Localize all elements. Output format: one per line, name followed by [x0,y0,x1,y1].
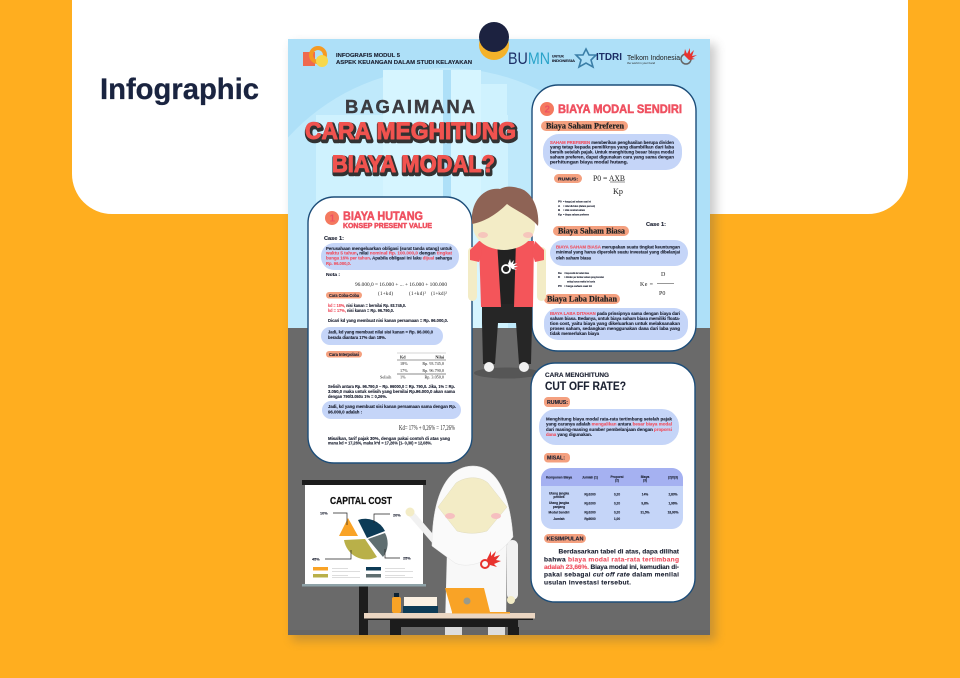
panel 3 heading: CARA MENGHITUNG [545,372,609,379]
logo: BUMN: INDONESIA [552,59,576,63]
pill: biaya laba ditahan: Biaya Laba Ditahan [547,294,618,304]
paragraph: kesimpulan: adalah 23,66%. Biaya modal ini, kemudian di- [544,564,679,571]
paragraph: kesimpulan: Berdasarkan tabel di atas, dapa dilihat [558,548,680,556]
title shadow: CARA MEGHITUNG [306,120,517,147]
table: wacc: 0,20 [614,510,620,514]
case 1 label: Case 1: [324,236,344,242]
title: BAGAIMANA [345,96,475,117]
formula: Ke: Ke = [640,282,654,288]
callout: saham biasa: BIAYA SAHAM BIASA merupakan suatu tingkat keuntungan [556,244,680,250]
legend: preferen: = harga jual saham saat ini [563,200,591,204]
poster [288,22,710,635]
table: wacc: Jumlah [553,517,565,521]
table: wacc: Utang jangka [549,492,569,496]
legend: preferen: A [558,204,561,208]
panel: biaya modal sendiri [532,85,696,351]
trial results: kd = 17%, nisi kanan = Rp. 96.790,0. [328,308,394,313]
icon: number 2: 2 [544,104,550,116]
nota label: Nota : [326,272,340,277]
table: wacc: Proporsi [610,475,624,479]
callout: saham preferen: saham preferen, dapat digunakan cara yang sama dengan [550,154,674,160]
pill: cara coba-coba: Cara Coba-Coba [329,293,360,298]
table: wacc: Rp1000 [584,492,596,496]
callout: saham preferen: perhitungan biaya modal hutang. [550,160,628,164]
pill: rumus [554,174,582,183]
paragraph: misalkan: mana kd = 17,26%, maka k*d = 17,26% (1- 0,30) = 12,08%. [328,440,432,446]
formula: P0 [593,174,625,196]
table: wacc: 0,20 [614,492,620,496]
formula: present value: (1+kd)² [409,291,426,297]
callout: saham biasa: minimal yang harus diperoleh suatu investasi yang dibelanjai [556,250,680,254]
books [403,597,438,613]
callout: laba ditahan: BIAYA LABA DITAHAN pada prinsipnya sama dengan biaya dari [550,311,680,316]
desk [364,588,535,635]
table: interpolasi [380,353,446,380]
callout: persamaan: Jadi, kd yang membuat sisi kanan persamaan sama dengan Rp. [328,404,456,409]
callout: saham preferen: bersih setelah pajak. Untuk menghitung besar biaya modal [550,150,674,154]
pill: misal: MISAL: [547,456,565,462]
callout: saham biasa [550,240,688,266]
figure: woman in hijab [406,466,518,635]
formula: Ke [640,272,674,297]
logo: Telkom Indonesia: Telkom Indonesia [627,53,681,62]
formula: present value: (1+kd)² [431,291,448,297]
table: wacc: 1,96% [668,502,678,506]
white header card [72,0,908,214]
paragraph: misalkan: Misalkan, tarif pajak 30%, dengan pakai contoh di atas yang [328,436,450,441]
table: wacc: (3) [643,478,647,482]
logo: BUMN: BUMN [508,49,550,68]
legend: preferen: B [558,208,561,212]
icon: hijab logo [481,551,501,568]
laptop [445,588,510,614]
paragraph: kesimpulan: usulan investasi tersebut. [544,580,631,586]
table: wacc: 14% [642,492,648,496]
table: wacc: Komponen Biaya [546,476,572,480]
formula: present value: 96.000,0 = 16.000 + ... + 16.000 + 100.000 [355,282,447,288]
table: wacc: Rp5000 [584,517,596,521]
logo: BUMN: UNTUK [552,54,565,58]
table: wacc: 18,90% [668,510,679,514]
paragraph: selisih: Selisih antara Rp. 96.790,0 – Rp. 96000,0 = Rp. 790,0. Jika, 1% = Rp. [328,384,455,389]
callout: rumus: Menghitung biaya modal rata-rata tertimbang setelah pajak [546,416,673,422]
poster background [288,39,710,635]
legend: biasa: = biaya modal dari saham biasa [564,271,589,275]
table: wacc [541,468,683,529]
trial results: kd = 18%, nisi kanan = bernilai Rp. 93.745,0. [328,303,406,308]
table: wacc: 31,5% [640,510,650,514]
callout: obligasi: Rp. 96.000,0. [326,261,351,266]
table: interpolasi: Rp. 3.050,0 [424,374,444,380]
table: wacc: 1,00 [614,517,620,521]
header title: INFOGRAFIS MODUL 5 [336,53,400,59]
paragraph: selisih: dengan 790/3.050x 1% = 0,26%. [328,394,387,399]
legend: preferen [558,200,595,216]
table: wacc: Modal Sendiri [549,510,570,514]
pill: cara interpolasi: Cara Interpolasi [329,352,359,357]
callout: jadi kd: Jadi, kd yang membuat nilai sisi kanan = Rp. 96.000,0 [328,330,434,334]
callout: jadi kd [321,327,443,345]
legend: biasa [558,271,604,288]
legend: preferen: Kp [558,212,562,216]
title shadow [306,120,517,180]
legend: preferen: = nilai nominal saham [563,208,585,212]
callout: laba ditahan [544,308,688,340]
legend: biasa: P0 [558,284,562,288]
logo: Telkom Indonesia: the world in your hand [627,61,656,65]
logo: course [303,48,328,67]
bottle [392,593,401,613]
panel: cut off rate [531,363,695,602]
panel 1 heading [343,209,432,230]
table: wacc: pendek [553,495,565,499]
pie chart: 10% [320,512,328,516]
pill: biaya saham biasa: Biaya Saham Biasa [558,226,625,236]
legend: biasa: = dividen per lembar saham yang konstan [564,275,604,279]
formula: kd result: Kd= 17% + 0,26% = 17,26% [399,424,455,432]
formula: present value [355,282,448,297]
panel: biaya hutang [308,197,472,463]
callout: obligasi: waktu 5 tahun , nilai nominal Rp. 100.000,0 dengan tingkat [325,250,453,256]
heading: Infographic: Infographic [100,73,259,106]
panel 3 heading: CUT OFF RATE? [545,381,626,393]
trial results: Dicari kd yang membuat nisi kanan persamaan = Rp. 96.000,0. [328,318,448,323]
table: interpolasi: 1% [400,374,406,380]
logo: ITDRI: ITDRI [596,52,622,63]
callout: obligasi [321,243,459,270]
panel 2 heading: BIAYA MODAL SENDIRI [558,102,682,116]
pie chart: 45% [312,558,320,562]
table: interpolasi: 17% [400,368,408,373]
chart legend [313,567,413,578]
pie chart: 25% [403,556,411,560]
paragraph: kesimpulan: pakai sebagai cut off rate dalam menilai [544,572,679,578]
legend: preferen: = biaya saham preferen [563,212,589,216]
table: interpolasi: Nilai [435,354,445,360]
callout: jadi kd: berada diantara 17% dan 18%. [328,335,386,340]
pie chart [312,512,411,562]
callout: saham biasa: oleh saham biasa [556,256,592,260]
legend: biasa: setiap bunus waktu ke bunia [567,280,595,284]
table: wacc: 2,80% [668,492,678,496]
callout: laba ditahan: proses saham, sedangkan menggunakan dana dari laba yang [550,326,680,331]
legend: biasa: = harga saham saat ini [564,284,592,288]
callout: laba ditahan: tion cost, yaitu biaya yang dikeluarkan untuk melaksanakan [550,321,680,326]
table: wacc: panjang [553,505,565,509]
table: wacc: 0,20 [614,502,620,506]
table: wacc: Rp1000 [584,510,596,514]
pill: biaya saham preferen: Biaya Saham Preferen [546,122,625,130]
callout: rumus: dana yang digunakan. [546,432,592,437]
paragraph: kesimpulan: bahwa biaya modal rata-rata tertimbang [544,556,679,564]
title [305,96,517,180]
pill: rumus: RUMUS: [558,176,578,182]
callout: persamaan: 96.000,0 adalah : [328,410,362,414]
paragraph: misalkan [328,436,450,446]
callout: rumus: dari masing-masing sumber pembelanjaan dengan proporsi [546,427,672,432]
table: interpolasi: Selisih [380,374,392,380]
formula: P0: P0 = AXB [593,174,625,183]
panel 1 heading: KONSEP PRESENT VALUE [343,223,432,230]
panel 3 heading [545,372,626,393]
chart board: capital cost [302,480,426,635]
table: interpolasi: 18% [400,361,408,366]
formula: present value: (1+kd) [378,292,393,297]
paragraph: kesimpulan [544,548,680,586]
table: wacc: (2)X(3) [668,476,678,480]
callout: persamaan [322,401,461,419]
pill: misal [544,453,570,462]
callout: laba ditahan: saham biasa. Bedanya, untuk biaya saham biasa memiliki floata- [550,316,681,321]
icon: number 1 [325,211,339,225]
case 1 label: Case 1: [646,222,666,228]
poster shadow [292,44,716,641]
callout: obligasi: Perusahaan mengeluarkan obligasi (surat tanda utang) untuk [326,246,453,251]
callout: obligasi: bunga 16% per tahun . Apabila obligasi ini laku dijual seharga [326,256,453,260]
title shadow: BIAYA MODAL? [333,153,496,180]
legend: preferen: P0 [558,200,562,204]
pie chart: 20% [393,514,401,518]
trial results [328,303,448,323]
header logos [303,48,697,68]
table: wacc: (2) [615,478,619,482]
chart heading: CAPITAL COST [330,496,392,507]
pin [479,22,509,60]
legend: biasa: D [558,275,561,279]
header logos: ASPEK KEUANGAN DALAM STUDI KELAYAKAN [336,60,472,66]
table: wacc: 9,8% [641,502,649,506]
pill: kesimpulan: KESIMPULAN [546,536,584,542]
legend: preferen: = nilai dividen (dalam persen) [563,204,595,208]
icon: number 1: 1 [330,214,336,224]
callout: rumus [539,409,679,445]
logo: BUMN [508,49,576,68]
logo: ITDRI [576,49,622,67]
callout: rumus: yang caranya adalah mengalikan antara besar biaya modal [546,422,672,426]
pill: rumus: RUMUS: [547,400,568,406]
panel 1 heading: BIAYA HUTANG [343,209,423,223]
formula: P0: Kp [613,187,623,196]
table: interpolasi: Kd [400,354,406,360]
title: BIAYA MODAL? [332,151,495,178]
formula: Ke: D [661,272,666,278]
table: interpolasi: Rp. 93.745,0 [422,361,444,367]
logo: Telkom Indonesia [627,48,697,65]
formula: Ke: P0 [659,291,665,297]
legend: biasa: Ke [558,271,562,275]
pill: cara interpolasi [326,351,362,358]
figure: woman in red jacket [468,187,546,378]
table: wacc: Utang jangka [549,501,569,505]
title: CARA MEGHITUNG [305,118,516,145]
table: interpolasi: Rp. 96.790,0 [422,368,444,374]
callout: saham preferen: SAHAM PREFEREN memberikan penghasilan berupa dividen [550,140,674,145]
callout: laba ditahan: tidak memerlukan biaya [550,331,600,336]
callout: saham preferen [543,134,682,170]
icon: number 2 [540,102,554,116]
callout: saham preferen: yang tetap kepada pemiliknya yang diambilkan dari laba [550,144,675,150]
paragraph: selisih [328,384,456,399]
table: wacc: Rp1000 [584,502,596,506]
table: wacc: Biaya [641,475,649,479]
pill: kesimpulan [544,534,586,543]
pill: rumus [544,397,570,407]
paragraph: selisih: 3.050,0 maka untuk selisih yang bernilai Rp.96.000,0 akan sama [328,389,456,394]
table: wacc: Jumlah (1) [582,476,598,480]
